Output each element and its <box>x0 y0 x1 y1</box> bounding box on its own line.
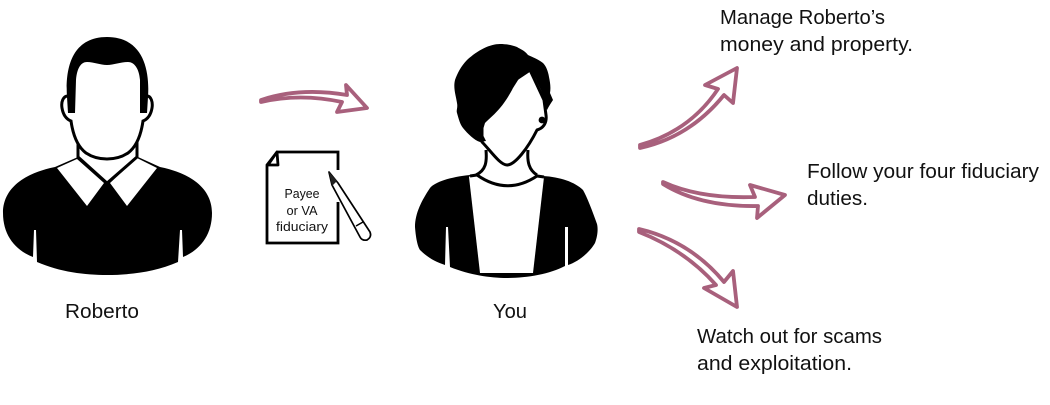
pen <box>329 172 371 240</box>
document text: Payee <box>284 186 320 201</box>
arrow: to money and property <box>640 68 737 148</box>
arrow: to scams <box>639 229 737 307</box>
text: scams <box>697 326 882 375</box>
icon: document with pen <box>267 152 371 243</box>
text: scams: Watch out for scams <box>697 326 882 348</box>
icon: Roberto <box>3 37 212 275</box>
text: fiduciary duties <box>807 161 1039 210</box>
text: manage money: money and property. <box>720 34 913 56</box>
text: manage money <box>720 7 913 56</box>
document text <box>276 186 329 234</box>
text: fiduciary duties: Follow your four fiduciary <box>807 161 1039 183</box>
text: fiduciary duties: duties. <box>807 188 868 210</box>
document text: or VA <box>286 203 318 218</box>
arrow: to fiduciary duties <box>663 182 785 218</box>
icon: You <box>415 44 598 278</box>
text: scams: and exploitation. <box>697 353 852 375</box>
label: Roberto: Roberto <box>65 301 139 323</box>
text: manage money: Manage Roberto’s <box>720 7 885 29</box>
label: You: You <box>493 301 527 323</box>
arrow: Roberto to You <box>261 85 367 112</box>
document text: fiduciary <box>276 219 329 234</box>
